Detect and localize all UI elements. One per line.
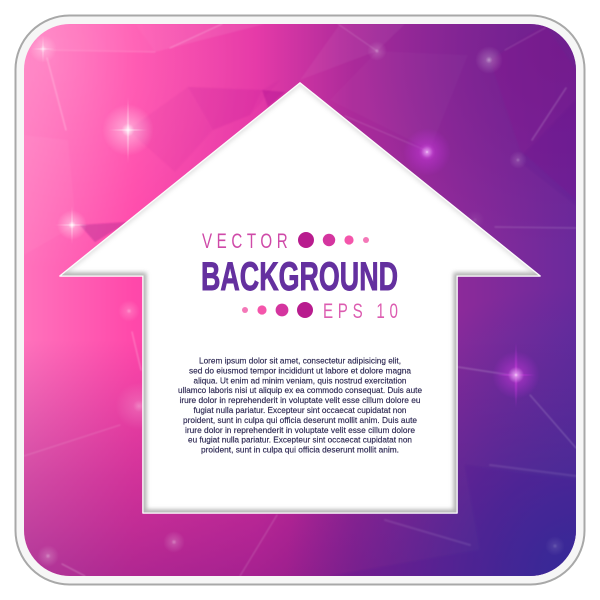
body text block: proident, sunt in culpa qui officia deserunt mollit anim.	[201, 445, 399, 455]
dots: bottom row	[242, 302, 313, 318]
body text block: eu fugiat nulla pariatur. Excepteur sint occaecat cupidatat non	[188, 435, 412, 445]
heading: EPS 10: EPS 10	[323, 298, 398, 323]
body text block: fugiat nulla pariatur. Excepteur sint occaecat cupidatat non	[194, 405, 407, 415]
heading: VECTOR: VECTOR	[202, 228, 288, 253]
body text block: proident, sunt in culpa qui officia deserunt mollit anim. Duis aute	[183, 415, 417, 425]
body text block	[178, 356, 422, 455]
body text block: Lorem ipsum dolor sit amet, consectetur adipisicing elit,	[199, 356, 401, 366]
body text block: irure dolor in reprehenderit in voluptate velit esse cillum dolore eu	[180, 395, 421, 405]
dots: top row	[298, 232, 369, 248]
body text block: irure dolor in reprehenderit in voluptate velit esse cillum dolore	[185, 425, 415, 435]
body text block: ullamco laboris nisi ut aliquip ex ea commodo consequat. Duis aute	[178, 385, 422, 395]
facets: pink light	[108, 24, 402, 78]
body text block: sed do eiusmod tempor incididunt ut labore et dolore magna	[189, 365, 411, 375]
house shape panel	[60, 83, 540, 513]
body text block: aliqua. Ut enim ad minim veniam, quis nostrud exercitation	[194, 375, 407, 385]
heading: BACKGROUND: BACKGROUND	[201, 255, 398, 299]
sparkle lights	[29, 35, 565, 567]
facets: dark	[80, 88, 284, 242]
